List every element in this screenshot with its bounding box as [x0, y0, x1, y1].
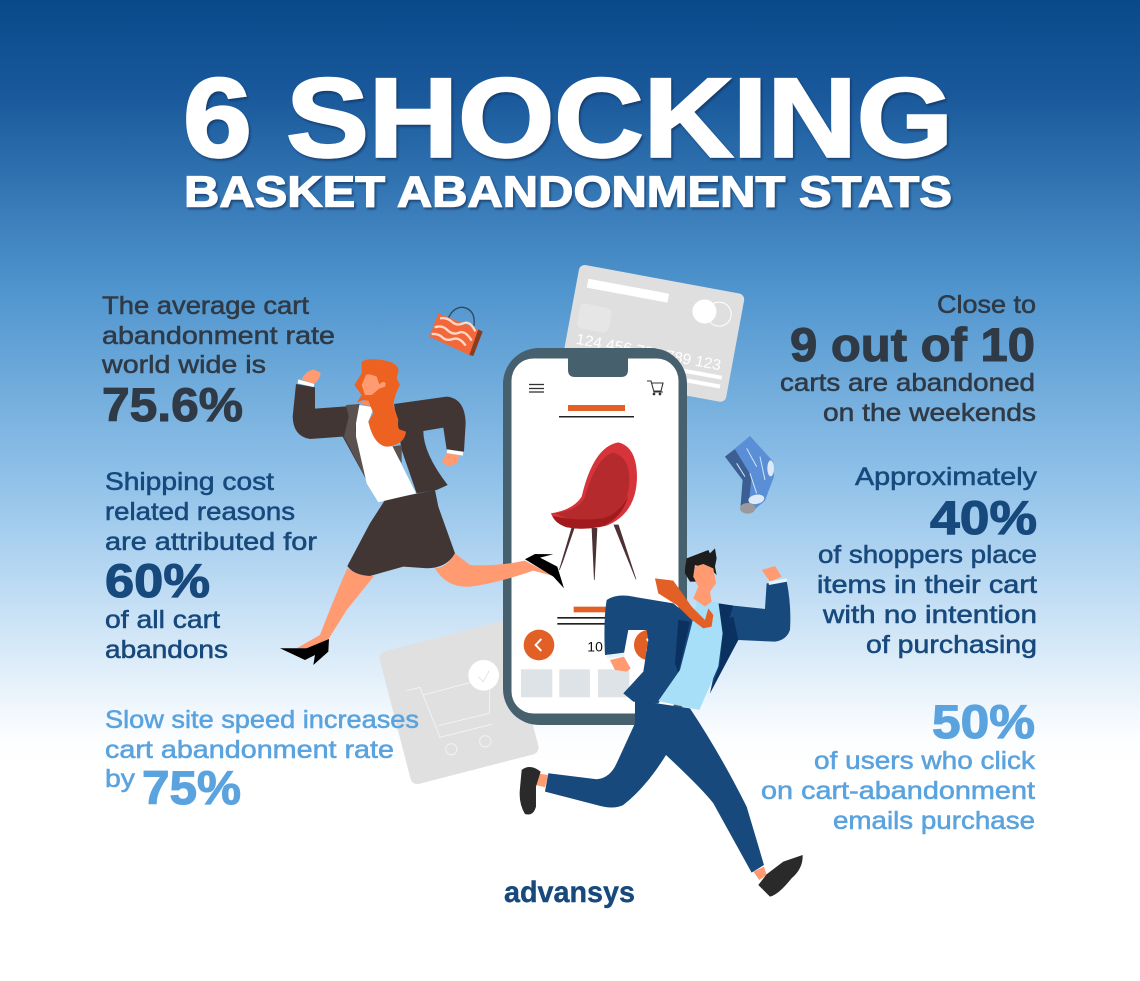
man: jacket [604, 581, 790, 703]
illustration: running man [520, 548, 803, 897]
man: socks [536, 773, 767, 880]
stat: 60% shipping cost: Shipping cost [105, 468, 274, 496]
stat: 9 out of 10 weekends: carts are abandoned [780, 369, 1035, 397]
stat: 9 out of 10 weekends: on the weekends [823, 399, 1036, 427]
stat: 40% no intention: items in their cart [817, 571, 1037, 599]
illustration: running woman [280, 359, 564, 665]
stat: 40% no intention: 40% [930, 491, 1037, 544]
phone: product heading bars [559, 405, 634, 418]
stat: 50% emails [761, 695, 1036, 835]
stat: 75% site speed: Slow site speed increases [105, 706, 419, 734]
stat: 9 out of 10 weekends: 9 out of 10 [790, 318, 1035, 371]
stat: 75.6% average rate [101, 292, 335, 431]
man: neck [693, 587, 712, 607]
stat: 60% shipping cost: of all cart [105, 606, 220, 634]
man: tie [655, 578, 713, 628]
stat: 50% emails: of users who click [814, 747, 1036, 775]
stat: 40% no intention: of purchasing [866, 631, 1037, 659]
woman: shirt [356, 405, 416, 502]
woman: shoes [280, 554, 564, 665]
phone: menu icon [529, 384, 544, 392]
stat: 60% shipping cost [105, 468, 317, 664]
stat: 50% emails: 50% [932, 695, 1035, 748]
title: 6 SHOCKING [183, 56, 953, 180]
man: hands and cuffs [610, 566, 782, 672]
stat: 60% shipping cost: 60% [105, 554, 210, 607]
icon: credit card [560, 264, 745, 403]
woman: legs [297, 553, 553, 648]
stat: 50% emails: on cart-abandonment [761, 777, 1035, 805]
stat: 75.6% average rate: world wide is [101, 351, 266, 379]
phone mockup [503, 348, 687, 725]
woman: hair [354, 359, 406, 447]
stat: 75.6% average rate: The average cart [102, 292, 309, 320]
stat: 75.6% average rate: 75.6% [102, 378, 243, 431]
stat: 75% site speed: cart abandonment rate [105, 736, 394, 764]
stat: 40% no intention: Approximately [855, 463, 1038, 491]
stat: 75.6% average rate: abandonment rate [102, 322, 335, 350]
man: shirt [658, 602, 723, 710]
stat: 75% site speed: by [105, 765, 136, 793]
woman: neck [360, 397, 375, 407]
phone: cart icon [647, 381, 663, 395]
man: face [693, 564, 716, 592]
stat: 75% site speed: 75% [142, 761, 241, 814]
stat: 9 out of 10 weekends [780, 291, 1036, 427]
icon: handbag [429, 307, 483, 356]
stat: 60% shipping cost: related reasons [105, 498, 295, 526]
icon: credit card: 124 456 789 789 123 [575, 331, 722, 374]
stat: 60% shipping cost: are attributed for [105, 528, 317, 556]
stat: 60% shipping cost: abandons [105, 636, 228, 664]
man: shoes [520, 767, 803, 897]
phone: lower controls: 10 [587, 639, 603, 655]
stat: 40% no intention: with no intention [822, 601, 1037, 629]
woman: face [362, 374, 386, 395]
woman: hands [302, 369, 460, 467]
woman: skirt [347, 490, 455, 576]
stat: 40% no intention [817, 463, 1038, 659]
stat: 9 out of 10 weekends: Close to [937, 291, 1036, 319]
title: BASKET ABANDONMENT STATS [184, 168, 952, 216]
stat: 40% no intention: of shoppers place [818, 541, 1037, 569]
man: hair [685, 548, 717, 582]
stat: 50% emails: emails purchase [833, 807, 1035, 835]
stat: 75% site speed [105, 706, 419, 814]
icon: sock [725, 436, 774, 514]
man: trousers [545, 700, 764, 873]
icon: cart card [378, 620, 540, 786]
chair [551, 442, 637, 580]
phone: lower controls [521, 607, 665, 697]
logo: advansys: advansys [504, 876, 635, 909]
woman: jacket [293, 384, 466, 493]
man: lapels [675, 603, 738, 693]
